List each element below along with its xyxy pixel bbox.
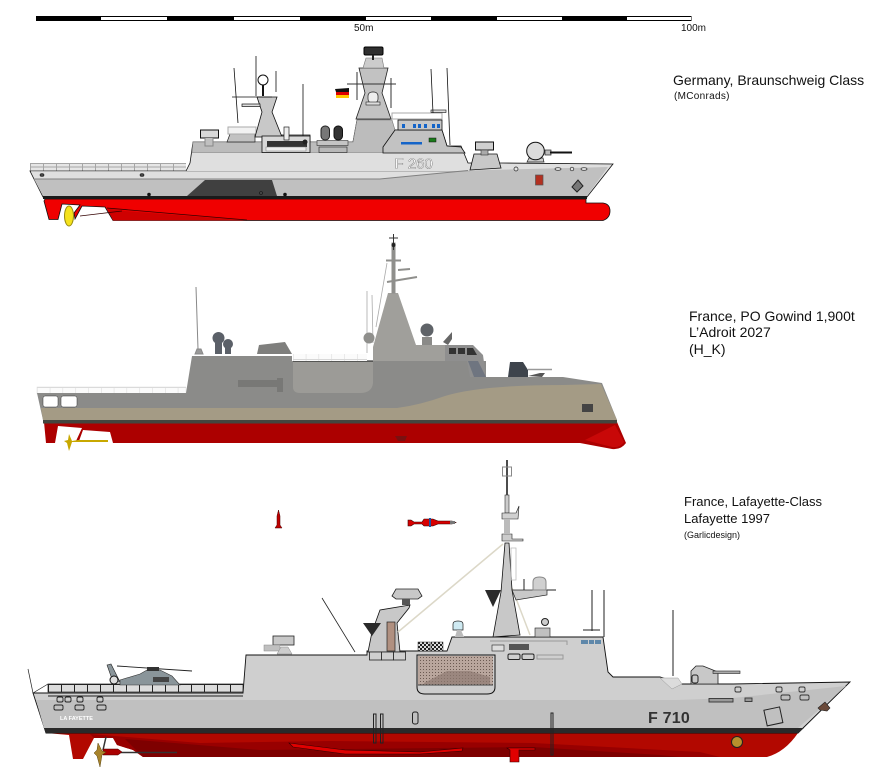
deck edge (48, 695, 243, 697)
shaft and bracket (100, 737, 177, 752)
label: Lafayette: (Garlicdesign) (684, 530, 740, 540)
bridge rail and windows (392, 68, 450, 145)
missile launchers (317, 126, 348, 152)
central bay (417, 655, 495, 694)
ship: France Gowind (37, 234, 626, 451)
aft tower (255, 97, 282, 137)
stern rail (30, 163, 186, 171)
scale bar (36, 16, 706, 34)
main gun (691, 666, 740, 684)
deck ramp (660, 678, 682, 689)
red underwater hull (44, 199, 610, 220)
tower (373, 293, 445, 361)
hull dark marking (238, 378, 283, 392)
label: Lafayette: France, Lafayette-Class (684, 494, 823, 509)
foredeck fittings (514, 167, 587, 171)
radar stay line (322, 598, 355, 652)
hull crest (536, 175, 543, 185)
aft radars (212, 332, 233, 354)
stern propeller (64, 206, 74, 226)
ship: Germany Braunschweig class (30, 47, 613, 226)
pennant number: F 260 (394, 156, 433, 172)
search radar (392, 589, 422, 605)
hull marks (374, 707, 783, 755)
tower base boxes (370, 652, 406, 660)
rudder propeller (64, 434, 108, 451)
forward superstructure details (490, 590, 604, 660)
helicopter (107, 664, 192, 685)
main mast (493, 543, 520, 637)
main gun (527, 142, 572, 162)
forward tower (356, 68, 391, 119)
bow thruster (732, 736, 742, 748)
aft tower (368, 605, 410, 652)
label: Gowind (689, 308, 855, 357)
label: Gowind: (H_K) (689, 341, 726, 357)
aft deckhouse (227, 134, 255, 142)
brown tower panel (387, 622, 395, 651)
scale bar: 50m (354, 23, 373, 34)
hull emblem (582, 404, 593, 412)
midship rail (293, 354, 367, 361)
midship boats (262, 127, 310, 152)
forward launcher (476, 142, 494, 155)
mast arm and dome (512, 577, 556, 600)
hull portholes (40, 174, 286, 196)
hangar top (257, 342, 292, 354)
long stay (398, 544, 530, 635)
propeller (94, 743, 106, 767)
stern mast (28, 669, 48, 693)
dark funnel cap (363, 623, 381, 636)
stern ovals (54, 697, 106, 710)
label: Lafayette (684, 494, 823, 540)
hull shaft fairing (107, 208, 247, 220)
aft mast (195, 287, 203, 354)
missile horizontal (408, 518, 456, 527)
red hull (46, 733, 798, 759)
hull grey (37, 356, 617, 420)
radar top (347, 47, 396, 108)
main gun (508, 362, 552, 377)
lower hull grey (36, 686, 846, 728)
keel fin (507, 748, 535, 762)
stern rail (37, 387, 186, 394)
bow red highlight (585, 425, 624, 447)
midship dome (453, 621, 464, 637)
dark camouflage panel (187, 180, 277, 196)
bridge (445, 345, 486, 377)
aft mast sphere (232, 56, 303, 137)
ship: France Lafayette class (28, 460, 850, 767)
dark mast panel (485, 590, 501, 607)
anchor (572, 180, 583, 192)
mast (364, 234, 417, 353)
stern cutouts (43, 396, 77, 407)
sonar bump (395, 436, 407, 441)
label: Gowind: L’Adroit 2027 (689, 324, 771, 340)
aft launcher box (200, 130, 218, 146)
red hull shading (90, 734, 720, 757)
forward antenna (672, 610, 674, 676)
anchor (818, 702, 830, 711)
label: Braunschweig class (673, 72, 864, 102)
red underwater hull (44, 422, 626, 449)
pennant number: F 710 (648, 710, 690, 727)
boot stripe (44, 728, 804, 733)
label: Braunschweig class: (MConrads) (674, 91, 730, 102)
ship name: LA FAYETTE (60, 716, 93, 722)
vents (418, 642, 443, 651)
upper mast (502, 460, 523, 580)
waterline (43, 196, 587, 199)
hull (33, 637, 850, 733)
german flag (335, 88, 349, 98)
missile vertical (275, 510, 282, 528)
deck rail (48, 684, 243, 692)
forward breakwater (470, 154, 501, 170)
bilge keel (289, 743, 463, 754)
label: Gowind: France, PO Gowind 1,900t (689, 308, 855, 324)
aft launcher (264, 636, 294, 654)
waterline (43, 420, 617, 424)
forecastle hatches (709, 687, 809, 702)
scale bar: 100m (681, 23, 706, 34)
hull sides (30, 120, 613, 197)
aft rail (228, 127, 256, 134)
radar dome (420, 324, 452, 345)
hangar recess panel (293, 361, 373, 393)
label: Braunschweig class: Germany, Braunschweig Class (673, 72, 864, 88)
label: Lafayette: Lafayette 1997 (684, 511, 770, 526)
lower hull grey band (34, 167, 608, 196)
beige camouflage (41, 384, 617, 420)
superstructure band (192, 120, 395, 152)
